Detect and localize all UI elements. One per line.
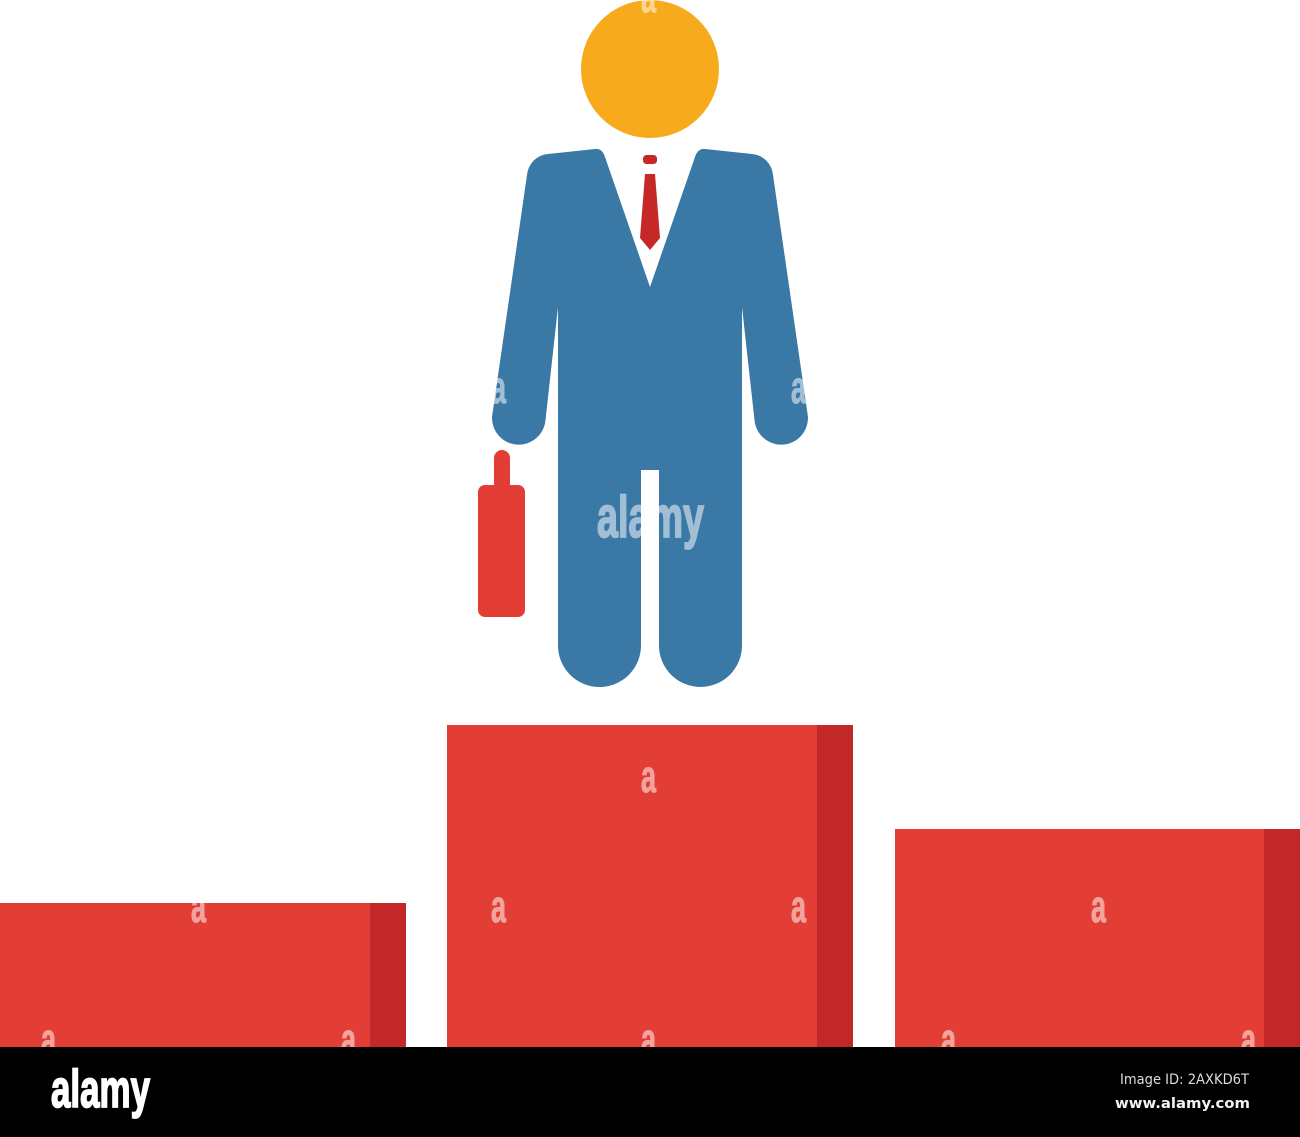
watermark: repeated letters: a [41, 1014, 57, 1065]
businessman figure [478, 0, 808, 687]
footer image ID: Image ID: 2AXKD6T [1120, 1072, 1249, 1088]
icon: tie [640, 174, 660, 250]
watermark: repeated letters: a [491, 881, 507, 932]
watermark: repeated letters: a [341, 1014, 357, 1065]
icon: briefcase [478, 450, 525, 617]
watermark: repeated letters: a [641, 1014, 657, 1065]
icon: tie knot [643, 155, 657, 164]
podium: centre, highest step [447, 725, 853, 1048]
footer website: www.alamy.com [1115, 1096, 1250, 1112]
watermark: repeated letters: a [791, 362, 807, 413]
footer bar [0, 1047, 1300, 1137]
podium: left, lowest step [0, 903, 406, 1048]
podium: right, middle step [895, 829, 1300, 1048]
icon: head [581, 0, 719, 138]
watermark: repeated letters: a [1241, 1014, 1257, 1065]
watermark: repeated letters: a [191, 881, 207, 932]
watermark: repeated letters: a [791, 881, 807, 932]
watermark: centre logo: alamy [597, 485, 704, 550]
watermark: repeated letters: a [491, 362, 507, 413]
watermark: repeated letters: a [941, 1014, 957, 1065]
watermark: repeated letters: a [1091, 881, 1107, 932]
watermark: repeated letters: a [641, 751, 657, 802]
footer logo: alamy [51, 1060, 150, 1119]
icon: suit body [492, 149, 808, 687]
